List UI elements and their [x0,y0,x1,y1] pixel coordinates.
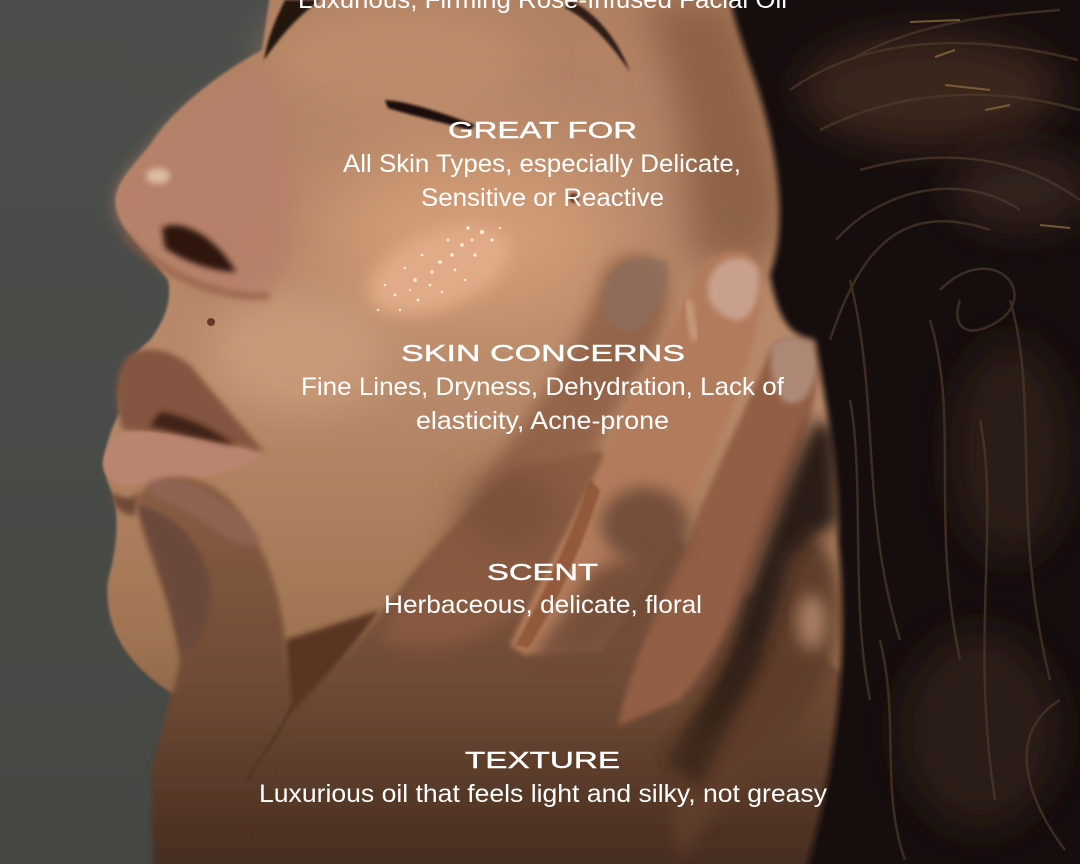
heading: texture: TEXTURE [465,747,620,773]
moles [569,193,579,203]
section: great for: Sensitive or Reactive [421,184,664,212]
pinky finger [670,530,839,860]
section: skin concerns [301,340,784,435]
section: texture: Luxurious oil that feels light and silky, not greasy [259,780,828,808]
section: scent [384,559,702,619]
heading: scent: SCENT [487,559,598,585]
index finger in shadow [380,255,668,648]
palm and back of hand [153,450,860,864]
section: great for: All Skin Types, especially Delicate, [343,150,741,178]
ring finger [618,339,818,726]
heading: great for: GREAT FOR [448,117,637,143]
section: scent: Herbaceous, delicate, floral [384,591,702,619]
section: texture [259,747,828,808]
section: skin concerns: elasticity, Acne-prone [416,407,669,435]
cheek light [320,150,620,320]
heading: skin concerns: SKIN CONCERNS [401,340,685,366]
closed eye lash [385,100,475,130]
photo: lips [103,350,265,515]
under-jaw shadow [285,610,380,720]
index nail [602,258,668,332]
photo: hand [137,251,860,864]
middle finger [510,251,761,655]
section: great for [343,117,741,212]
dark recess behind fingers [690,420,838,740]
forehead light [270,5,530,115]
temple shade near hair [640,0,790,270]
eyebrow [264,0,320,60]
section: skin concerns: Fine Lines, Dryness, Dehydration, Lack of [301,373,784,401]
photo: hair [725,0,1080,864]
nose [117,65,292,296]
thumb [137,477,292,840]
cheek sparkle [356,207,524,333]
gap between fingers [515,480,600,648]
photo: face [105,0,860,800]
